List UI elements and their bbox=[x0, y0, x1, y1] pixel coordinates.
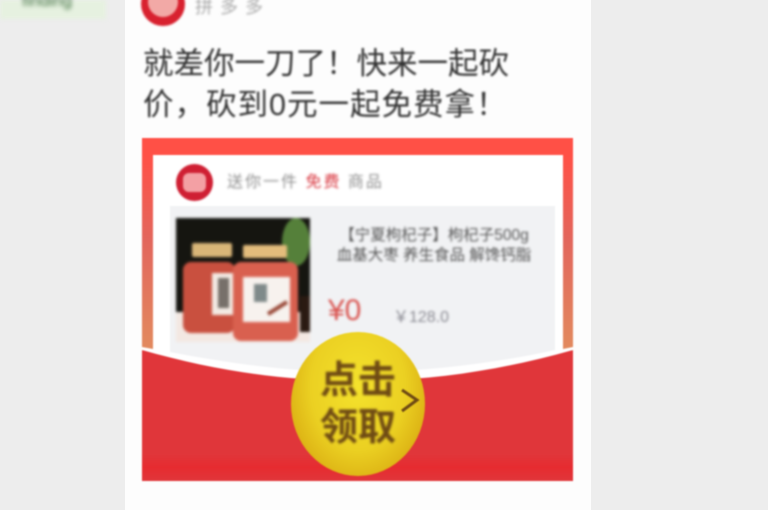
heading: share message bbox=[143, 46, 510, 122]
panel: white message column bbox=[125, 0, 591, 510]
card white body with curved bottom bbox=[141, 154, 574, 380]
leaves bbox=[282, 218, 310, 266]
button text: 领取 bbox=[320, 407, 396, 449]
avatar inner disc bbox=[148, 0, 178, 17]
right jar bbox=[233, 245, 298, 341]
icon: sender avatar bbox=[141, 0, 185, 26]
button: click to claim bbox=[291, 332, 425, 476]
icon: chevron arrow bbox=[400, 388, 420, 413]
button text: 点击 bbox=[320, 360, 396, 402]
card heading row bbox=[174, 162, 384, 202]
logo inner mark bbox=[183, 173, 206, 192]
heading: share message: 价，砍到0元一起免费拿！ bbox=[143, 88, 507, 122]
product title: 【宁夏枸杞子】枸杞子500g bbox=[339, 227, 529, 244]
heading: share message: 就差你一刀了！快来一起砍 bbox=[143, 47, 509, 81]
left jar bbox=[183, 243, 235, 333]
product photo bbox=[174, 216, 312, 344]
chat bubble: previous green message bbox=[0, 0, 106, 19]
product title bbox=[336, 225, 532, 264]
icon: brand logo bbox=[176, 164, 213, 201]
button text bbox=[320, 358, 396, 449]
panel: red share card bbox=[142, 138, 573, 481]
price: zero yuan: ¥0 bbox=[328, 294, 361, 327]
original price: ￥128.0 bbox=[393, 309, 449, 326]
product title: 血基大枣 养生食品 解馋钙脂 bbox=[337, 247, 531, 264]
card invitation text: 送你一件 免费 商品 bbox=[227, 174, 384, 191]
